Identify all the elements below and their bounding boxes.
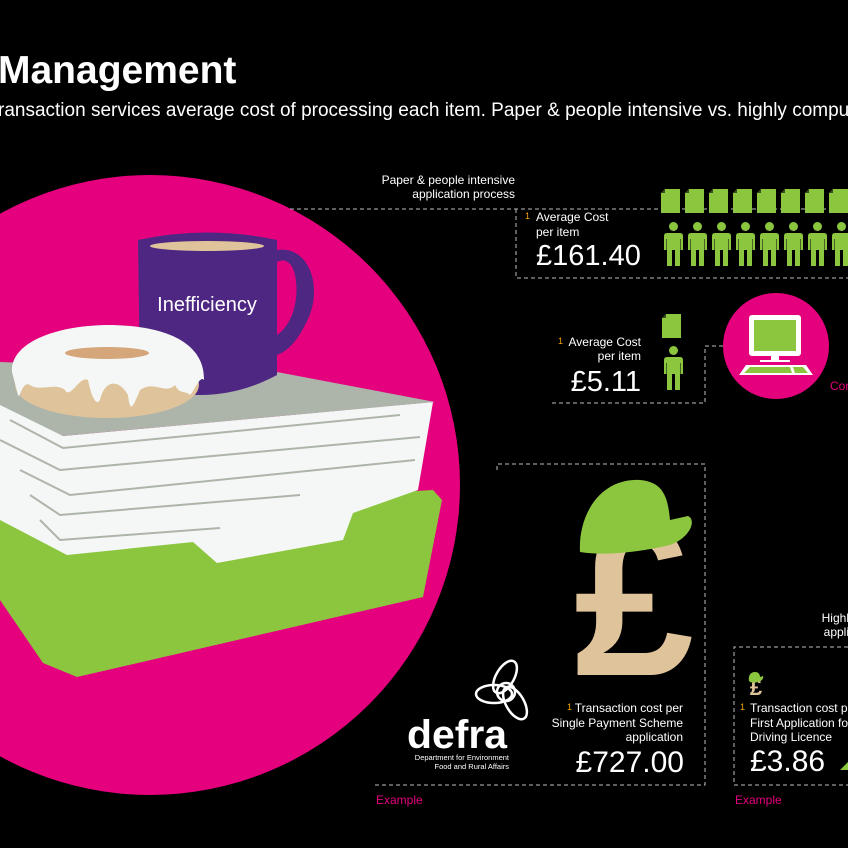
- panel: £727.00: 1: [567, 702, 572, 712]
- panel: £5.11: Average Cost: [568, 335, 642, 349]
- panel: £727.00: Transaction cost per: [575, 701, 683, 715]
- pink circle: [0, 175, 460, 795]
- dashed connector box 1: [290, 209, 848, 278]
- icon: green triangle sliver: [840, 762, 848, 770]
- dashed connector box 2: [552, 346, 737, 403]
- panel: £161.40: 1: [525, 211, 530, 221]
- mug: [138, 232, 314, 395]
- label: paper & people intensive: application process: [412, 187, 515, 201]
- panel: £161.40: Average Cost: [536, 210, 609, 224]
- label: paper & people intensive: Paper & people intensive: [382, 173, 515, 187]
- panel: £5.11: £5.11: [571, 366, 641, 398]
- green tray: [0, 490, 442, 677]
- mug label: Inefficiency: [157, 294, 257, 316]
- icon: big pound with bowler hat: £: [574, 480, 694, 721]
- panel: £727.00: application: [626, 730, 683, 744]
- icons: single doc and person: [662, 314, 683, 390]
- icon: small pound with hat: £: [750, 675, 763, 700]
- logo: defra: Food and Rural Affairs: [434, 762, 509, 771]
- panel: £161.40: £161.40: [536, 240, 641, 272]
- icon: computer circle: [723, 293, 829, 399]
- panel: £3.86: [740, 701, 848, 778]
- panel: £3.86: 1: [740, 702, 745, 712]
- panel: £5.11: [558, 335, 642, 398]
- panel: £727.00: [552, 701, 684, 779]
- panel: £161.40: [525, 210, 641, 272]
- panel: £5.11: 1: [558, 336, 563, 346]
- paper stack: [0, 362, 435, 563]
- logo: defra: Department for Environment: [415, 753, 510, 762]
- panel: £161.40: per item: [536, 225, 579, 239]
- logo: defra: defra: [407, 713, 508, 757]
- logo: defra: [407, 657, 532, 771]
- title: Management: [0, 49, 236, 92]
- panel: £727.00: £727.00: [576, 746, 684, 779]
- panel: £5.11: per item: [598, 349, 641, 363]
- icons: 8 docs and 8 people: [661, 189, 848, 266]
- dashed box 4: [734, 647, 848, 785]
- panel: £3.86: £3.86: [750, 745, 825, 778]
- label: example 2: Example: [735, 793, 782, 807]
- panel: £3.86: Driving Licence: [750, 730, 832, 744]
- label: example 1: Example: [376, 793, 423, 807]
- dashed box 3: [375, 464, 705, 785]
- illustration: inefficiency circle: [0, 175, 460, 795]
- donut: [12, 325, 204, 418]
- panel: £727.00: Single Payment Scheme: [552, 716, 683, 730]
